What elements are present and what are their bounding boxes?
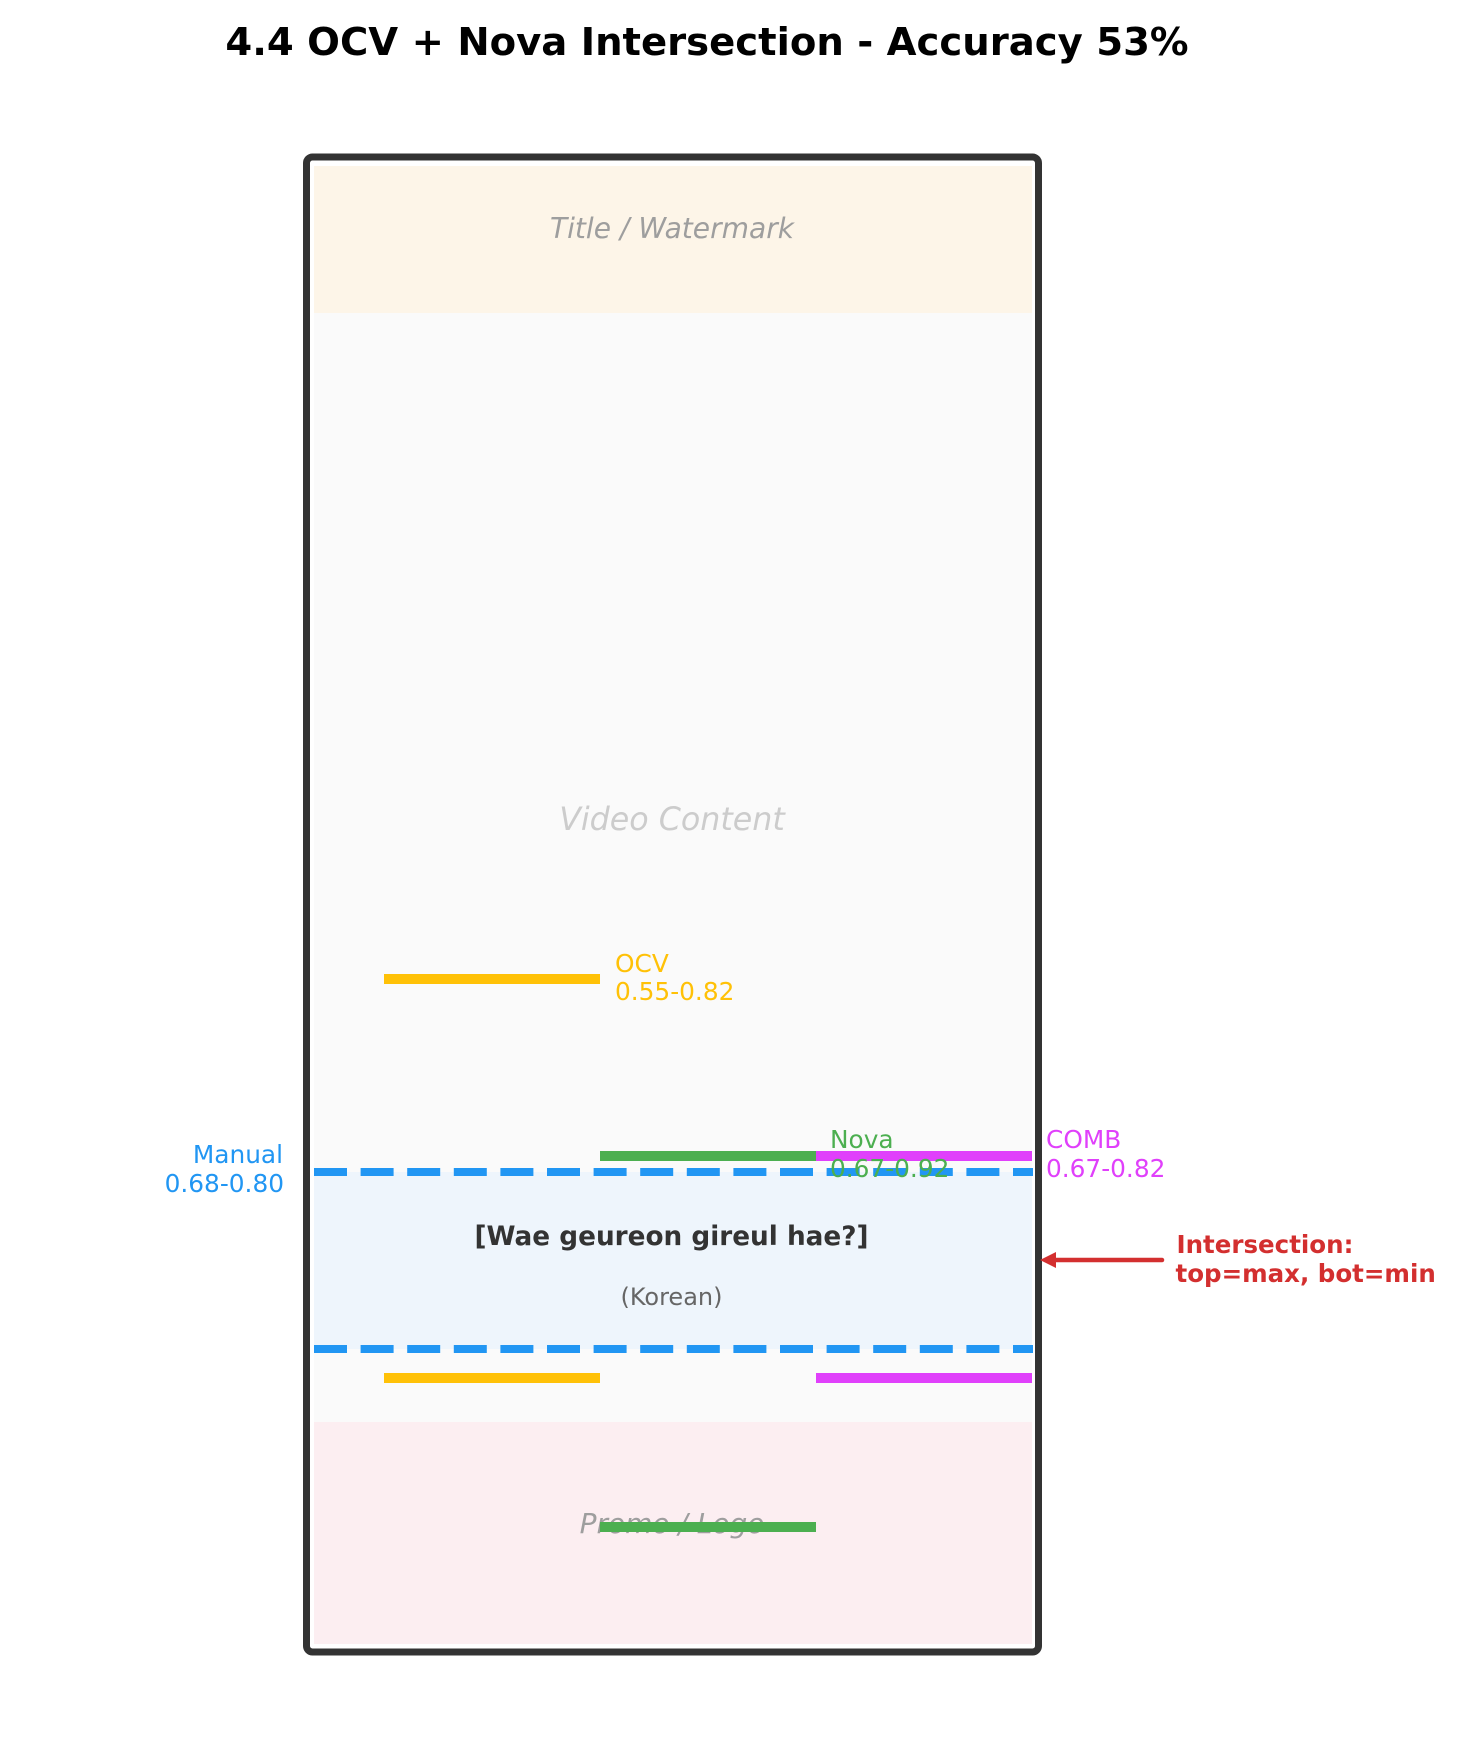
COMB range xyxy=(816,1125,1165,1383)
frame border xyxy=(306,157,1038,1652)
callout: intersection rule: top=max, bot=min xyxy=(1176,1259,1436,1288)
arrow: intersection callout xyxy=(1040,1252,1162,1268)
Nova range xyxy=(600,1151,816,1532)
Manual range xyxy=(165,1140,1033,1349)
title: 4.4 OCV + Nova Intersection - Accuracy 53% xyxy=(225,20,1189,65)
callout: intersection rule: Intersection: xyxy=(1176,1230,1353,1259)
subtitle text: (Korean) xyxy=(621,1283,722,1311)
region: title / watermark: Title / Watermark xyxy=(550,212,796,245)
Manual range: 0.68-0.80 xyxy=(165,1169,284,1198)
callout: intersection rule xyxy=(1176,1230,1436,1288)
region: promo / logo: Promo / Logo xyxy=(580,1507,764,1540)
OCV range: 0.55-0.82 xyxy=(615,977,734,1006)
Nova label xyxy=(830,1125,949,1183)
frame background xyxy=(306,157,1039,1652)
Manual range: Manual xyxy=(193,1140,283,1169)
subtitle text: [Wae geureon gireul hae?] xyxy=(474,1222,869,1252)
subtitle text xyxy=(474,1222,869,1311)
OCV range xyxy=(384,949,734,1383)
OCV range: OCV xyxy=(615,949,669,978)
Nova label: 0.67-0.92 xyxy=(830,1154,949,1183)
region: video content xyxy=(314,313,1032,1422)
label: video content: Video Content xyxy=(559,802,786,838)
intersection band xyxy=(314,1172,1032,1349)
region: promo / logo xyxy=(314,1422,1032,1644)
region: title / watermark xyxy=(314,166,1032,313)
COMB range: COMB xyxy=(1046,1125,1121,1154)
Nova label: Nova xyxy=(830,1125,894,1154)
COMB range: 0.67-0.82 xyxy=(1046,1154,1165,1183)
panel: video frame xyxy=(306,157,1039,1652)
